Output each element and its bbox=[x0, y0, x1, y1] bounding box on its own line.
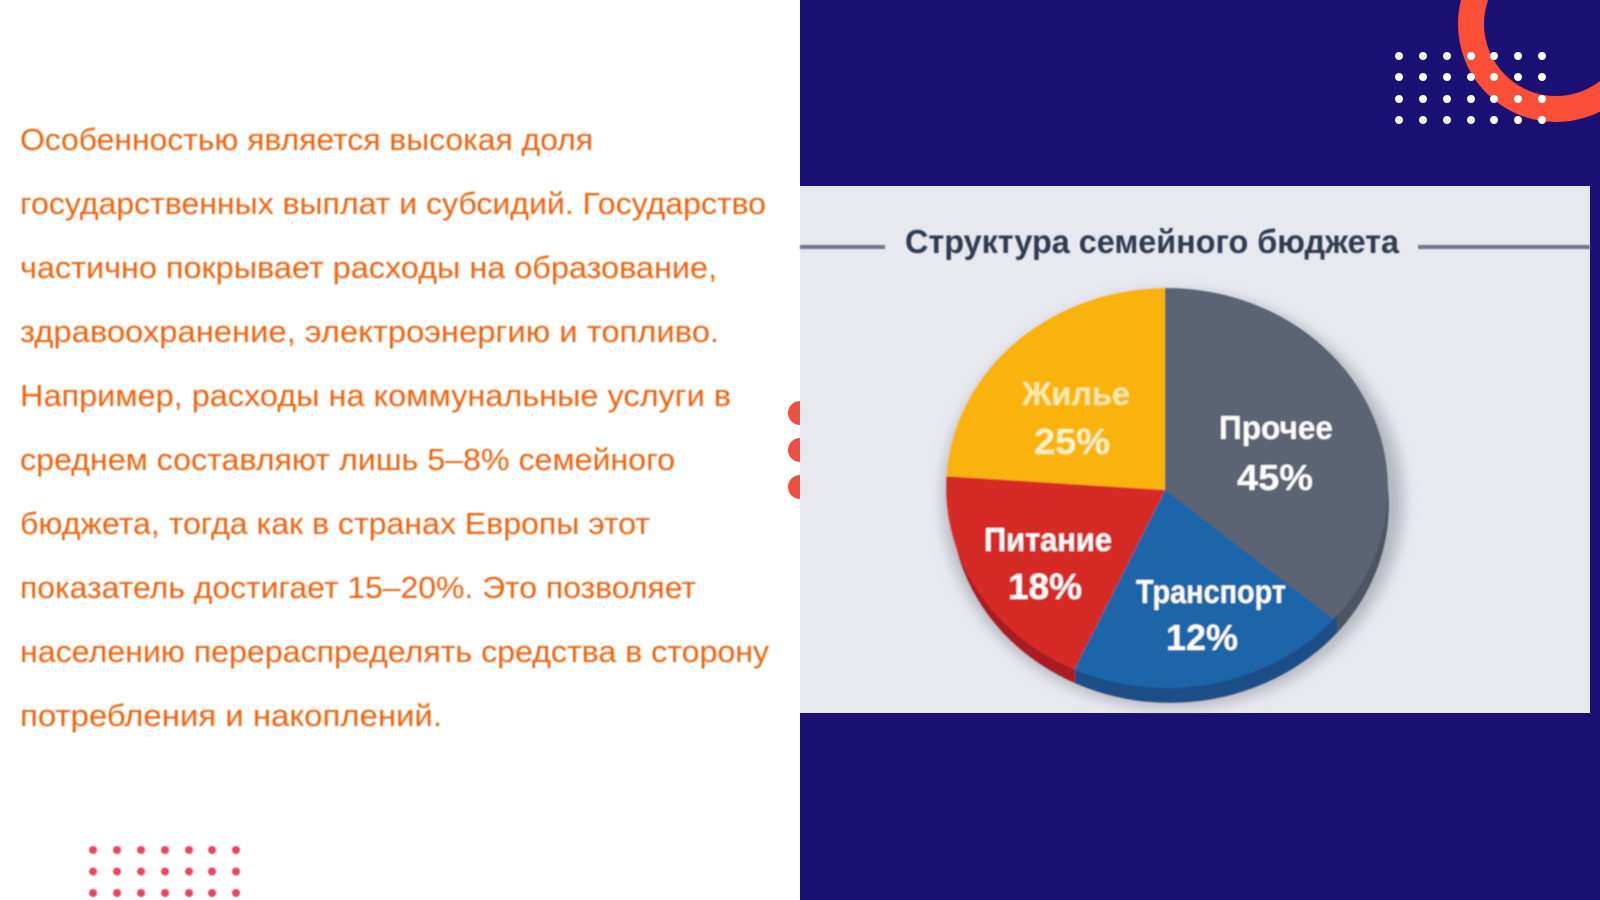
text block: main paragraph: бюджета, тогда как в странах Европы этот bbox=[20, 506, 650, 541]
text block: main paragraph: государственных выплат и субсидий. Государство bbox=[20, 186, 766, 221]
decoration: red dots at panel edge bbox=[788, 401, 812, 499]
text block: main paragraph: показатель достигает 15–20%. Это позволяет bbox=[20, 570, 696, 605]
pie labels: Жилье bbox=[1021, 375, 1130, 412]
slice: transport 12% bbox=[1074, 490, 1334, 688]
pie labels bbox=[984, 375, 1333, 658]
pie labels: 18% bbox=[1008, 566, 1082, 607]
slice: housing 25% bbox=[946, 287, 1166, 492]
pie labels: 12% bbox=[1166, 617, 1238, 658]
text block: main paragraph: Например, расходы на коммунальные услуги в bbox=[20, 378, 731, 413]
pie labels: 25% bbox=[1034, 421, 1110, 462]
panel: navy background bbox=[800, 0, 1600, 900]
text block: main paragraph: Особенностью является высокая доля bbox=[20, 122, 593, 157]
pie labels: Прочее bbox=[1219, 409, 1333, 446]
text block: main paragraph: среднем составляют лишь 5–8% семейного bbox=[20, 442, 675, 477]
panel: chart image background bbox=[800, 186, 1590, 713]
text block: main paragraph: частично покрывает расходы на образование, bbox=[20, 250, 717, 285]
text block: main paragraph: населению перераспределять средства в сторону bbox=[20, 634, 770, 669]
decoration: white dot grid bbox=[1395, 52, 1546, 124]
pie labels: 45% bbox=[1237, 457, 1313, 498]
decoration: red dot grid bottom left bbox=[89, 846, 240, 897]
pie labels: Питание bbox=[984, 521, 1112, 558]
slice: other 45% bbox=[1164, 287, 1388, 620]
slice: food 18% bbox=[945, 475, 1166, 670]
pie chart: family budget structure bbox=[936, 286, 1410, 714]
chart heading with rules bbox=[800, 223, 1590, 260]
decoration: coral ring bbox=[1471, 0, 1600, 109]
text block: main paragraph bbox=[20, 122, 770, 733]
chart title: Структура семейного бюджета bbox=[905, 223, 1400, 260]
text block: main paragraph: потребления и накоплений. bbox=[20, 698, 442, 733]
pie labels: Транспорт bbox=[1136, 573, 1286, 610]
text block: main paragraph: здравоохранение, электроэнергию и топливо. bbox=[20, 314, 719, 349]
